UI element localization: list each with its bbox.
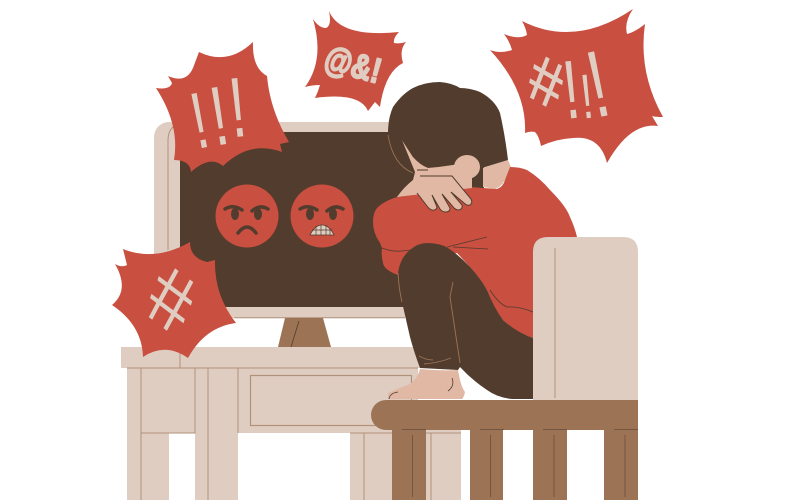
- speech burst: hash and exclamation marks: !: [577, 61, 597, 132]
- speech burst: hash and exclamation marks: !: [558, 43, 584, 137]
- icon: angry face gritting teeth: [290, 184, 354, 248]
- desk: [121, 347, 461, 500]
- speech burst: hash and exclamation marks: [490, 9, 663, 163]
- icon: monitor stand: [278, 318, 331, 347]
- ear and elbow: [454, 155, 480, 179]
- person: [388, 82, 533, 399]
- speech burst: hash: #: [139, 240, 203, 359]
- speech burst: exclamation marks: !: [183, 74, 215, 166]
- face and skin under hair: [397, 140, 472, 197]
- foot: [388, 369, 465, 399]
- arm and hand: [397, 170, 472, 212]
- illustration: monitor: [154, 122, 416, 347]
- sweater: [373, 167, 577, 338]
- speech burst: exclamation marks: !: [224, 60, 251, 156]
- speech burst: at ampersand exclamation: [305, 11, 406, 111]
- chair backrest and sweater behind it: [373, 160, 638, 400]
- speech burst: hash: [112, 240, 236, 359]
- speech burst: hash and exclamation marks: #: [525, 37, 568, 127]
- speech burst: exclamation marks: [156, 42, 289, 172]
- speech burst: exclamation marks: !: [204, 69, 234, 164]
- speech burst: at ampersand exclamation: @&!: [321, 38, 386, 91]
- trousers: [398, 243, 533, 399]
- icon: angry face frowning: [216, 184, 278, 248]
- speech burst: hash and exclamation marks: !: [578, 31, 618, 138]
- person: neck and gap: [472, 160, 511, 189]
- hair: [388, 82, 508, 168]
- chair seat and legs: [371, 400, 638, 500]
